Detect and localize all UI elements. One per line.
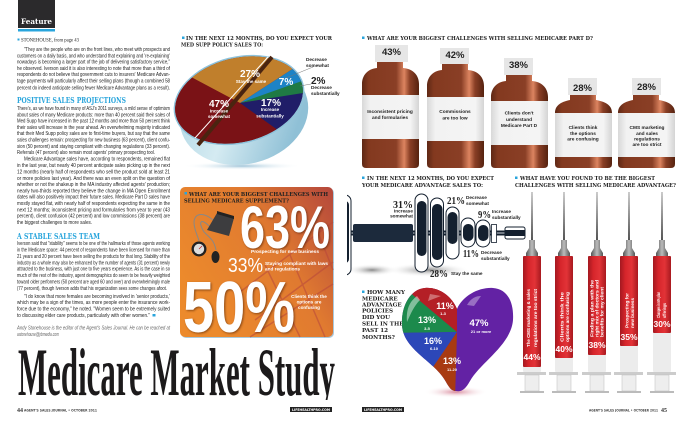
syringe 40%: 40% (555, 344, 573, 354)
footer right: AGENT'S SALES JOURNAL • OCTOBER 2011 (589, 408, 658, 412)
pie labels: 47% (209, 99, 229, 110)
heart labels: 11-20 (447, 367, 458, 372)
plunger labels: 9% (478, 210, 491, 221)
syringe 30% (647, 192, 676, 393)
syringe 35%: 35% (620, 332, 638, 342)
article text column: which may be a sign of the times, as more people enter the insurance work- (17, 300, 170, 306)
syringe 38% (582, 192, 611, 393)
syringe 30%: offerings (662, 303, 667, 318)
heart labels: 3-5 (424, 326, 431, 331)
heart labels: 16% (424, 336, 442, 346)
stat: 33%: 33% (228, 255, 263, 277)
article text column: sion (50 percent) and staying compliant with changing regulations (33 percent). (17, 144, 170, 150)
article text column: percent), client confusion (42 percent) and low commissions (38 percent) are (17, 214, 170, 220)
article text column: Referrals (47 percent) also remain most agents' primary prospecting tool. (17, 150, 155, 156)
syringe 44% (517, 192, 546, 393)
icon: blood pressure cuff (192, 211, 234, 263)
bottle 38% (491, 58, 548, 168)
plunger labels: 21% (447, 196, 465, 207)
syringe 40%: Clients think the (560, 291, 564, 342)
panel: part D challenges (362, 36, 675, 168)
article text column: about sales of many Medicare products: more than 40 percent said their sales of (17, 112, 170, 118)
stat: 33% (228, 255, 328, 277)
heart labels: 6-10 (430, 346, 439, 351)
article text column: (77 percent), though Iverson adds that his organization sees some changes afoot. (17, 286, 167, 292)
stat: 50%: 50% (183, 268, 295, 348)
panel: medicare advantage sales plunger chart (338, 176, 525, 280)
bottle 43%: and formularies (372, 115, 408, 121)
stat: 63%: 63% (240, 194, 330, 261)
plunger labels: Decrease (481, 250, 502, 255)
plunger labels: 31% (393, 200, 413, 211)
bottle 28% CMS: CMS marketing (630, 125, 665, 131)
article text column: 12 months (nearly half of respondents who sell the product sold at least 21 (17, 170, 170, 176)
article text column: "I do know that more females are becoming involved in 'senior products,' (24, 294, 170, 300)
article text column: STONEHOUSE, from page 43 (21, 36, 79, 44)
article text column: whether or not the shakeup in the MA industry affected agents' production; (17, 182, 170, 188)
panel heading: SELLING MEDICARE SUPPLEMENT? (184, 198, 290, 204)
pie labels: 17% (261, 98, 281, 109)
panel: medicare advantage challenges syringes (515, 176, 677, 393)
plunger labels (390, 195, 521, 280)
advantage heading (361, 176, 495, 189)
syringes heading (515, 176, 677, 189)
heart heading: HOW MANY (367, 290, 406, 296)
pie labels (208, 57, 340, 119)
article text column (16, 36, 170, 338)
advantage heading: YOUR MEDICARE ADVANTAGE SALES TO: (361, 183, 483, 189)
panel: medicare supplement challenges (180, 187, 334, 348)
plunger diagram (338, 194, 525, 275)
article text column: 21 years and 20 percent have been selling the products for that long. Stability of the (17, 254, 170, 260)
stat: 63%: Prospecting for new business (251, 249, 319, 255)
plunger labels: Increase (492, 209, 511, 214)
pie labels: substantially (311, 91, 340, 96)
bottle 43% (362, 45, 419, 168)
plunger labels: substantially (492, 215, 521, 220)
plunger labels: substantially (481, 256, 510, 261)
stat: 50%: options are (297, 300, 322, 304)
pie labels: 2% (311, 76, 326, 87)
heart chart (402, 288, 514, 396)
heart heading: MONTHS? (362, 335, 396, 341)
pie labels: 7% (279, 77, 293, 88)
bottle 43%: 43% (382, 47, 402, 58)
syringe 44%: regulations are too strict (533, 288, 538, 347)
advantage heading: IN THE NEXT 12 MONTHS, DO YOU EXPECT (367, 176, 495, 182)
footer left (17, 407, 332, 414)
plunger labels: Increase (394, 208, 413, 214)
syringe 40%: options are confusing (565, 292, 570, 342)
article text column: in the Medicare space: 44 percent of respondents have been licensed for more than (17, 248, 170, 254)
pie labels: Decrease (311, 85, 332, 90)
pie heading: MED SUPP POLICY SALES TO: (181, 42, 263, 48)
bottle 43%: Inconsistent pricing (367, 109, 413, 115)
bottle 42% (427, 48, 484, 168)
article text column: Med Supp have increased in the past 12 months and more than 50 percent think (17, 119, 170, 125)
heart labels: 13% (443, 356, 461, 366)
bottle 28% options: are confusing (567, 136, 599, 142)
article text column: nearly two-thirds reported they believe the change in MA Open Enrollment (17, 188, 170, 194)
pie chart (174, 54, 340, 169)
heart heading: ADVANTAGE (361, 302, 402, 308)
footer left: AGENT'S SALES JOURNAL • OCTOBER 2011 (24, 408, 97, 412)
bottle 42%: 42% (445, 50, 465, 61)
syringe 40% (549, 192, 578, 393)
plunger labels: somewhat (466, 201, 489, 206)
pie labels: Increase (210, 108, 229, 114)
heart labels: 1-3 (440, 311, 447, 316)
panel: how many policies heart (362, 288, 514, 396)
bottle 38%: 38% (509, 60, 529, 71)
bottle 38%: Medicare Part D (501, 123, 538, 129)
heading: positive sales projections: POSITIVE SALES PROJECTIONS (17, 95, 126, 105)
heart heading: DID YOU (362, 315, 390, 321)
article text column: nowadays is becoming a larger part of the job of delivering satisfactory service," (17, 60, 170, 66)
pie labels: somewhat (208, 114, 230, 119)
heart heading: PAST 12 (362, 328, 388, 334)
panel: med supp policy sales pie (174, 36, 340, 169)
bottle 28% CMS (618, 78, 675, 168)
bottle 28% CMS: are too strict (632, 142, 662, 148)
article text column: sales challenges remain: prospecting for new business (63 percent), client confu- (17, 138, 170, 144)
bottle 42%: are too low (442, 116, 468, 122)
footer right: 45 (661, 408, 667, 414)
syringe 38%: 38% (588, 340, 606, 350)
plunger labels: 11% (463, 249, 479, 260)
pie labels: substantially (256, 114, 284, 118)
bottle 28% options: 28% (573, 83, 593, 94)
pie labels: Stay the same (236, 79, 267, 84)
article text column: industry as a whole may also be enhanced by the number of agents (31 percent) newly (17, 260, 170, 266)
article text column: mostly stayed flat, with nearly half of respondents expecting the same in the (17, 201, 170, 207)
pie heading (181, 36, 332, 48)
heart heading: POLICIES (362, 308, 393, 314)
part D heading: WHAT ARE YOUR BIGGEST CHALLENGES WITH SELLING MEDICARE PART D? (366, 36, 594, 42)
footer right (589, 408, 667, 414)
article text column: he observed. Iverson said it is also interesting to note that more than a third of (17, 66, 170, 72)
heart labels: 11% (436, 301, 454, 311)
bottle 28% CMS: 28% (637, 82, 657, 93)
stat: 50%: confusing (298, 305, 320, 310)
heart heading: SELL IN THE (362, 322, 404, 328)
stat: 33%: Staying compliant with laws (265, 261, 328, 267)
article text column: next 12 months; inconsistent pricing and formularies from year to year (43 (17, 207, 170, 213)
syringe 35% (614, 192, 643, 393)
article text column: the biggest challenges to more sales. (17, 220, 92, 226)
bottle 28% options (555, 78, 612, 168)
author byline: Andy Stonehouse is the editor of the Agent's Sales Journal. He can be reached at (16, 326, 170, 332)
bottle 38%: Clients don't (505, 110, 534, 116)
syringe 35%: new business (630, 298, 635, 328)
floor shadows (346, 263, 470, 277)
bottle 38%: understand (506, 117, 532, 123)
heart labels: 13% (418, 315, 436, 325)
article text column: There's, as we have found in many of ASJ's 2011 surveys, a mild sense of optimism (17, 106, 170, 112)
bottle 42%: Commissions (439, 109, 471, 115)
pie heading: IN THE NEXT 12 MONTHS, DO YOU EXPECT YOUR (186, 36, 332, 42)
footer left: LIFEHEALTHPRO.COM (292, 408, 330, 412)
syringe 35%: Prospecting for (624, 293, 630, 328)
footer left: 44 (17, 408, 23, 414)
feature tab: Feature (21, 17, 52, 26)
article text column: or more policies last year). And there was an even split on the question of (17, 176, 170, 182)
panel heading: WHAT ARE YOUR BIGGEST CHALLENGES WITH (188, 192, 329, 198)
stat: 50%: Clients think the (291, 294, 327, 299)
pie labels: somewhat (306, 63, 329, 68)
syringe 44%: 44% (523, 352, 541, 362)
feature tab (18, 0, 55, 32)
panel heading (184, 192, 329, 204)
pie labels: Increase (261, 107, 280, 112)
article text column: percent do indeed anticipate selling fewer Medicare Advantage plans as a result). (17, 86, 170, 92)
plunger labels: somewhat (390, 214, 413, 218)
syringe 38%: right mix of doctors and (594, 280, 600, 337)
bottle 28% options: Clients think (569, 125, 598, 131)
article text column: their sales will increase in the year ahead. An overwhelming majority indicated (17, 125, 170, 131)
footer center label: LIFEHEALTHPRO.COM (364, 408, 402, 412)
article text column: tage payments will particularly affect their selling plans (though a combined 58 (17, 78, 170, 84)
bottle 28% options: the options (570, 131, 596, 137)
pie labels: Decrease (306, 57, 327, 62)
heart heading (361, 290, 406, 341)
heart labels: 21 or more (471, 329, 492, 334)
heart heading: MEDICARE (362, 296, 398, 302)
article text column: customers on a daily basis, and who understand that explaining and 're-explaining' (17, 53, 170, 59)
article text column: much of the rest of the industry, agent demographics do seem to be heavily weighted (17, 273, 170, 279)
syringe 38%: benefits for my client (600, 286, 604, 337)
article text column: "They are the people who are on the front lines, who meet with prospects and (24, 47, 170, 53)
plunger labels: 28% (430, 269, 448, 280)
article text column: Medicare Advantage sales have, according to respondents, remained flat (24, 157, 170, 163)
article text column: astonehouse@jrbmedia.com (17, 332, 59, 338)
article text column: force due to the economy," he noted. "Women seem to be extremely suited (17, 306, 170, 312)
article text column: Iverson said that "stability" seems to be one of the hallmarks of those agents working (17, 241, 170, 247)
plunger labels: Decrease (466, 195, 487, 200)
article text column: respondents do not believe that government cuts to insurers' Medicare Advan- (17, 72, 170, 78)
article text column: that their Med Supp policy sales are to first-time buyers, but say that the same (17, 131, 170, 137)
heart labels (418, 301, 492, 372)
syringe 30%: Changes in MA plan (656, 292, 661, 318)
pie labels: 27% (240, 69, 260, 80)
bottle 28% CMS: and sales (636, 131, 658, 137)
syringe 44%: The CMS marketing & sales (526, 289, 531, 347)
article text column: attracted to the business, with just one to five years experience. As is the case in so (17, 267, 170, 273)
article text column: toward older performers (50 percent are aged 60 and over) and overwhelmingly male (17, 280, 170, 286)
bottle 28% CMS: regulations (634, 136, 660, 142)
syringe 38%: Finding a plan with the (590, 279, 594, 337)
plunger labels: Stay the same (451, 271, 483, 276)
article text column: dates will also positively impact their future sales. Medicare Part D sales have (17, 195, 170, 201)
heading: a stable sales team: A STABLE SALES TEAM (16, 231, 100, 241)
stat: 33%: and regulations (265, 266, 300, 272)
article text column: to discussing elder care products, particularly with other women." (17, 313, 150, 319)
syringes heading: WHAT HAVE YOU FOUND TO BE THE BIGGEST (519, 176, 656, 182)
article text column: in the last year, but nearly 40 percent anticipate sales picking up in the next (17, 163, 170, 169)
syringe 30%: 30% (653, 319, 671, 329)
heart labels: 47% (469, 318, 489, 329)
